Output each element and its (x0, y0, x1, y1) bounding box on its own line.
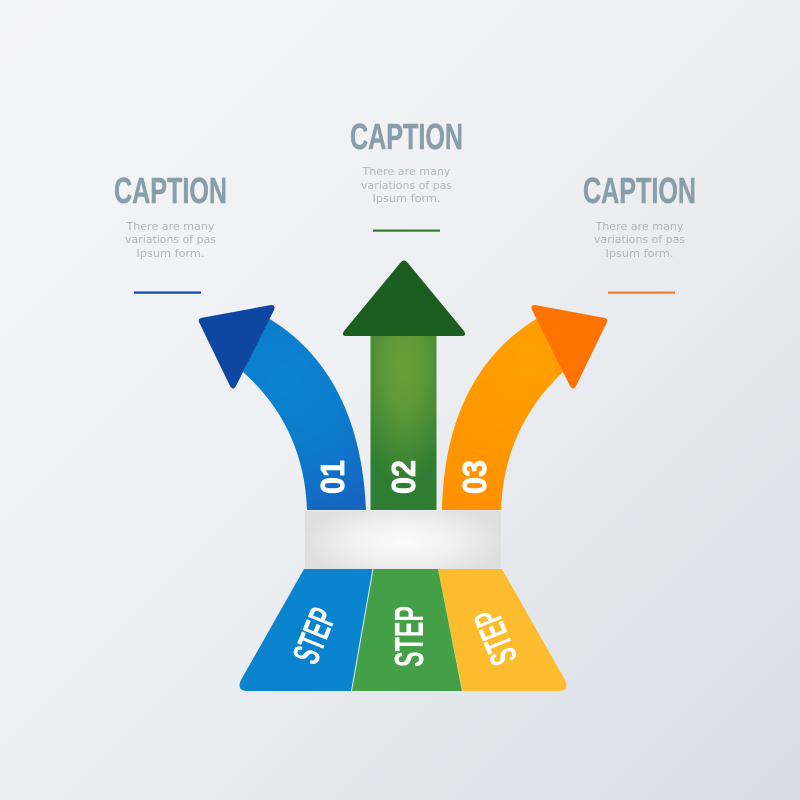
caption block: center: Ipsum form. (372, 192, 440, 205)
center band (305, 511, 501, 569)
number 03: 03 (456, 460, 493, 494)
arrow 01: blue (199, 305, 366, 510)
arrow 03: orange (442, 305, 607, 510)
step 3: yellow base (438, 569, 566, 691)
caption block: right: There are many (594, 220, 684, 233)
caption block: right: variations of pas (594, 233, 685, 246)
caption block: right (583, 170, 696, 294)
arrow 02: green (343, 260, 465, 510)
label: step 2: STEP (386, 606, 432, 667)
step 2: green base (352, 569, 462, 691)
caption block: center: CAPTION (350, 116, 463, 157)
caption block: left: There are many (125, 220, 215, 233)
number 02: 02 (385, 460, 422, 494)
caption block: left: variations of pas (125, 233, 216, 246)
caption block: center: variations of pas (361, 179, 452, 192)
caption block: left: CAPTION (114, 170, 227, 211)
step 1: blue base (240, 569, 372, 691)
caption block: center (350, 116, 463, 232)
caption block: left (114, 170, 227, 294)
caption block: center: There are many (361, 165, 451, 178)
label: step 1: STEP (285, 602, 345, 670)
number 01: 01 (314, 460, 351, 494)
caption block: right: CAPTION (583, 170, 696, 211)
label: step 3: STEP (466, 603, 526, 671)
caption block: right: Ipsum form. (606, 247, 674, 260)
caption block: left: Ipsum form. (136, 247, 204, 260)
